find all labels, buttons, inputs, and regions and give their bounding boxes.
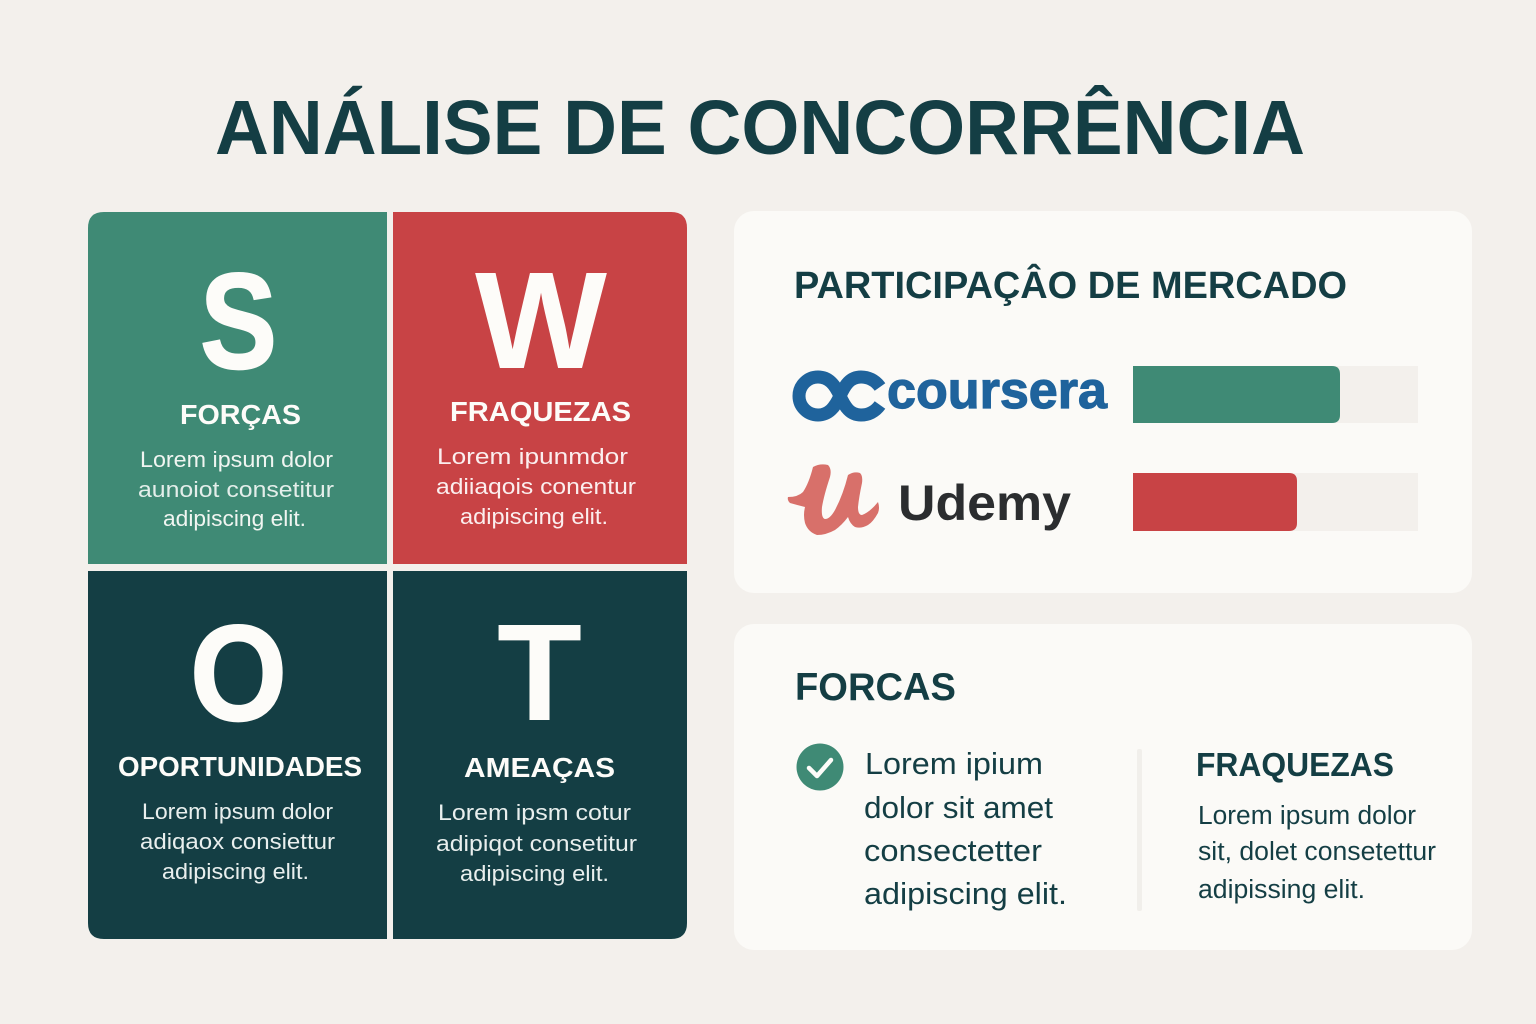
panel: threats: AMEAÇAS — [464, 752, 615, 783]
title: ANÁLISE DE CONCORRÊNCIA — [215, 84, 1305, 171]
panel: weaknesses: FRAQUEZAS — [450, 396, 631, 427]
panel: strengths: S — [200, 245, 277, 397]
panel: weaknesses: adipiscing elit. — [460, 504, 608, 529]
panel: opportunities — [88, 571, 387, 939]
bar: coursera share — [1133, 366, 1418, 423]
panel: opportunities: adiqaox consiettur — [140, 829, 336, 854]
panel: threats: Lorem ipsm cotur — [438, 800, 632, 825]
panel: SWOT matrix — [88, 212, 687, 939]
text: strengths description: adipiscing elit. — [864, 876, 1067, 911]
logo: udemy: Udemy — [898, 475, 1071, 531]
heading: market share: PARTICIPAÇÂO DE MERCADO — [794, 263, 1347, 307]
panel: strengths: Lorem ipsum dolor — [140, 447, 334, 472]
text: strengths description: consectetter — [864, 833, 1042, 868]
panel: strengths — [88, 212, 387, 564]
panel: opportunities: Lorem ipsum dolor — [142, 799, 334, 824]
panel: weaknesses: W — [475, 244, 608, 398]
text: weaknesses description: adipissing elit. — [1198, 876, 1365, 904]
logo: coursera: coursera — [887, 362, 1108, 420]
text: strengths description — [864, 746, 1067, 911]
bar: udemy share — [1133, 473, 1418, 531]
text: weaknesses description — [1198, 802, 1437, 904]
panel: threats: T — [497, 596, 582, 750]
panel: strengths: aunoiot consetitur — [138, 477, 335, 502]
panel: market share — [734, 211, 1472, 593]
panel: weaknesses — [393, 212, 687, 564]
panel: threats: adipiscing elit. — [460, 861, 609, 886]
panel: opportunities: OPORTUNIDADES — [118, 751, 362, 782]
panel: threats — [393, 571, 687, 939]
panel: weaknesses: Lorem ipunmdor — [437, 444, 629, 469]
heading: forcas: FORCAS — [795, 666, 956, 709]
panel: weaknesses: adiiaqois conentur — [436, 474, 637, 499]
panel: strengths: adipiscing elit. — [163, 506, 306, 531]
logo: udemy — [788, 464, 1071, 535]
text: strengths description: Lorem ipium — [865, 746, 1043, 781]
icon: check — [796, 744, 844, 790]
text: weaknesses description: Lorem ipsum dolor — [1198, 802, 1417, 830]
panel: strengths: FORÇAS — [180, 399, 301, 430]
text: strengths description: dolor sit amet — [864, 790, 1053, 825]
heading: fraquezas: FRAQUEZAS — [1196, 746, 1394, 783]
text: weaknesses description: sit, dolet consetettur — [1198, 838, 1437, 866]
panel: opportunities: O — [190, 597, 287, 749]
panel: strengths and weaknesses — [734, 624, 1472, 950]
panel: threats: adipiqot consetitur — [436, 831, 638, 856]
panel: opportunities: adipiscing elit. — [162, 859, 309, 884]
